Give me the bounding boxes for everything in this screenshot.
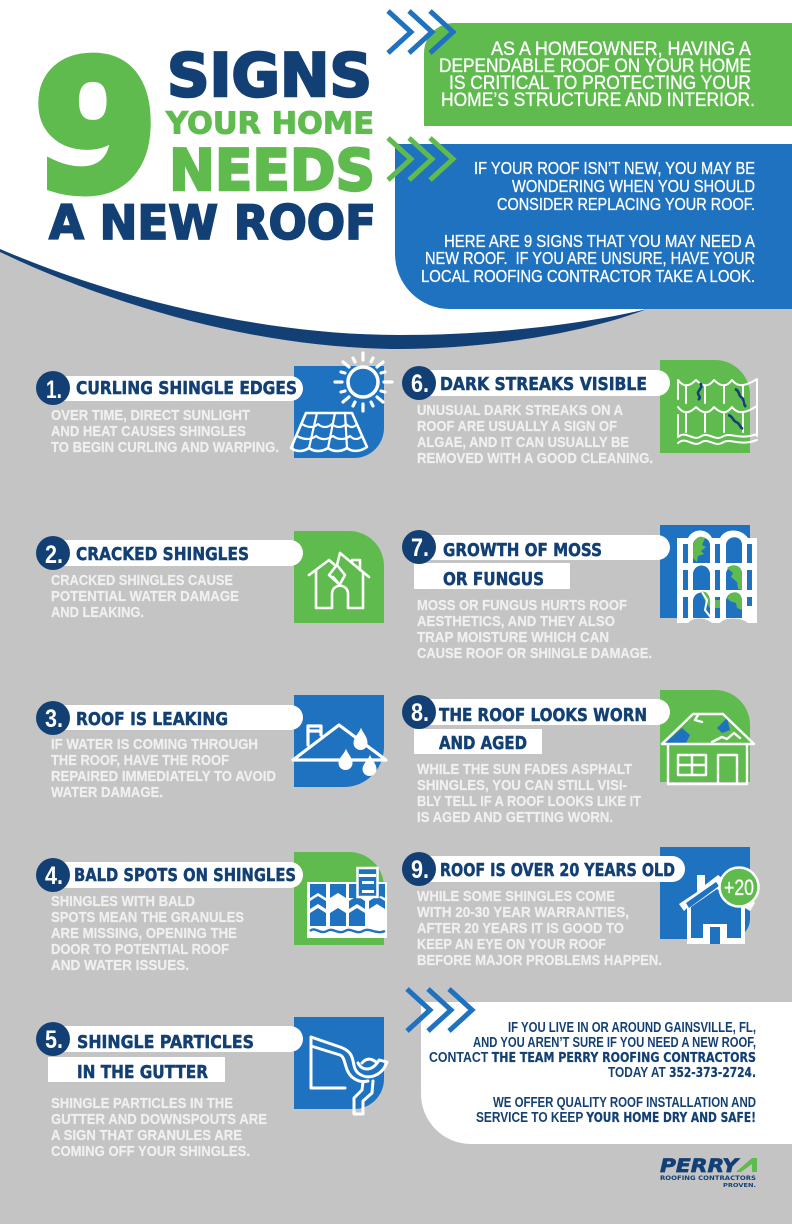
description xyxy=(417,889,662,969)
description: GUTTER AND DOWNSPOUTS ARE xyxy=(51,1112,267,1128)
title xyxy=(33,24,376,251)
description: SHINGLE PARTICLES IN THE xyxy=(51,1096,233,1112)
navy swoosh xyxy=(0,249,647,349)
panel: call to action xyxy=(421,1002,792,1144)
description: AFTER 20 YEARS IT IS GOOD TO xyxy=(417,921,624,937)
icon: bald shingles xyxy=(294,852,387,945)
description xyxy=(417,403,653,467)
description: CRACKED SHINGLES CAUSE xyxy=(51,573,233,589)
heading xyxy=(443,541,602,590)
title line: needs: NEEDS xyxy=(169,138,375,204)
number badge xyxy=(402,366,436,400)
description: POTENTIAL WATER DAMAGE xyxy=(51,589,239,605)
number badge: 4. xyxy=(45,862,63,890)
title line: signs: SIGNS xyxy=(167,41,372,111)
description: REMOVED WITH A GOOD CLEANING. xyxy=(417,451,653,467)
plus twenty label: +20 xyxy=(724,875,754,900)
heading: CRACKED SHINGLES xyxy=(76,545,249,565)
logo: Perry Roofing Contractors xyxy=(660,1155,757,1189)
heading xyxy=(77,1033,254,1083)
description: TRAP MOISTURE WHICH CAN xyxy=(417,630,609,646)
heading box line two xyxy=(48,1057,225,1082)
heading pill xyxy=(50,862,303,888)
description xyxy=(51,573,239,621)
intro text: HOME’S STRUCTURE AND INTERIOR. xyxy=(441,90,755,111)
number badge: 8. xyxy=(411,699,429,727)
panel: sign 8 xyxy=(402,690,754,826)
description: AESTHETICS, AND THEY ALSO xyxy=(417,614,615,630)
heading pill xyxy=(416,535,670,560)
heading box line two xyxy=(414,563,570,589)
number badge xyxy=(36,536,70,570)
number badge: 1. xyxy=(46,376,62,404)
icon: worn house xyxy=(660,690,754,784)
arrow: blue chevrons xyxy=(388,11,453,53)
panel: blue intro xyxy=(395,144,792,309)
heading pill xyxy=(50,540,303,566)
description: COMING OFF YOUR SHINGLES. xyxy=(51,1144,250,1160)
big numeral 9: 9 xyxy=(33,24,158,233)
description xyxy=(51,737,276,801)
heading: SHINGLE PARTICLES xyxy=(77,1033,254,1053)
panel: sign 9 xyxy=(402,847,758,969)
description: IF WATER IS COMING THROUGH xyxy=(51,737,258,753)
number badge: 3. xyxy=(45,705,63,733)
heading xyxy=(439,706,647,754)
arrow: green chevrons xyxy=(388,138,453,180)
description: WHILE THE SUN FADES ASPHALT xyxy=(417,762,632,778)
description: BLY TELL IF A ROOF LOOKS LIKE IT xyxy=(417,794,641,810)
icon: moss on tiles xyxy=(660,525,757,623)
description: AND HEAT CAUSES SHINGLES xyxy=(51,424,246,440)
logo roof mark xyxy=(736,1158,757,1172)
description: ROOF ARE USUALLY A SIGN OF xyxy=(417,419,617,435)
description: SHINGLES WITH BALD xyxy=(51,894,195,910)
description: DOOR TO POTENTIAL ROOF xyxy=(51,942,229,958)
panel: sign 1 xyxy=(36,353,392,458)
description: MOSS OR FUNGUS HURTS ROOF xyxy=(417,598,627,614)
intro text: DEPENDABLE ROOF ON YOUR HOME xyxy=(439,56,751,77)
title line: a new roof: A NEW ROOF xyxy=(49,196,376,251)
heading box line two xyxy=(414,729,542,754)
number badge xyxy=(402,695,436,729)
number badge xyxy=(402,852,436,886)
panel: sign 5 xyxy=(36,1017,387,1160)
heading: OR FUNGUS xyxy=(443,570,544,590)
number badge: 9. xyxy=(411,856,429,884)
description: SPOTS MEAN THE GRANULES xyxy=(51,910,244,926)
description: UNUSUAL DARK STREAKS ON A xyxy=(417,403,623,419)
intro question text xyxy=(421,158,755,286)
description: WATER DAMAGE. xyxy=(51,785,163,801)
number badge xyxy=(36,701,70,735)
heading: BALD SPOTS ON SHINGLES xyxy=(74,866,296,886)
heading pill xyxy=(50,705,303,730)
call to action text xyxy=(429,1020,756,1126)
description xyxy=(417,598,652,662)
intro text: AS A HOMEOWNER, HAVING A xyxy=(491,39,751,60)
number badge xyxy=(36,858,70,892)
description: ALGAE, AND IT CAN USUALLY BE xyxy=(417,435,629,451)
description: WHILE SOME SHINGLES COME xyxy=(417,889,615,905)
heading: THE ROOF LOOKS WORN xyxy=(439,706,647,726)
intro text xyxy=(439,39,755,111)
icon: sun and roof xyxy=(291,353,392,458)
number badge xyxy=(36,371,70,405)
icon: leaking roof xyxy=(293,695,386,787)
panel: sign 7 xyxy=(402,525,757,662)
heading: CURLING SHINGLE EDGES xyxy=(76,379,297,399)
description: AND LEAKING. xyxy=(51,605,144,621)
description: WITH 20-30 YEAR WARRANTIES, xyxy=(417,905,629,921)
description xyxy=(51,1096,267,1160)
number badge: 5. xyxy=(45,1026,63,1054)
description: AND WATER ISSUES. xyxy=(51,958,189,974)
icon: old house plus 20 xyxy=(660,847,758,944)
heading: IN THE GUTTER xyxy=(77,1063,208,1083)
number badge xyxy=(36,1022,70,1056)
heading: GROWTH OF MOSS xyxy=(443,541,602,561)
call to action text: TODAY AT 352-373-2724. xyxy=(608,1065,756,1081)
description xyxy=(51,894,244,974)
call to action text: CONTACT THE TEAM PERRY ROOFING CONTRACTORS xyxy=(429,1050,756,1066)
description: OVER TIME, DIRECT SUNLIGHT xyxy=(51,408,250,424)
panel: green intro xyxy=(424,23,792,126)
heading: DARK STREAKS VISIBLE xyxy=(440,375,647,395)
heading pill xyxy=(50,376,303,401)
description: ARE MISSING, OPENING THE xyxy=(51,926,237,942)
heading: ROOF IS OVER 20 YEARS OLD xyxy=(440,861,675,881)
description: IS AGED AND GETTING WORN. xyxy=(417,810,613,826)
panel: sign 2 xyxy=(36,531,384,623)
heading: AND AGED xyxy=(439,734,527,754)
icon: cracked house xyxy=(294,531,384,623)
icon: dark streaks xyxy=(660,360,757,453)
description: SHINGLES, YOU CAN STILL VISI- xyxy=(417,778,627,794)
description: BEFORE MAJOR PROBLEMS HAPPEN. xyxy=(417,953,662,969)
logo tagline: PROVEN. xyxy=(723,1183,756,1189)
description: TO BEGIN CURLING AND WARPING. xyxy=(51,440,279,456)
number badge xyxy=(402,530,436,564)
icon: gutter xyxy=(294,1017,387,1114)
heading pill xyxy=(416,370,670,396)
description: THE ROOF, HAVE THE ROOF xyxy=(51,753,229,769)
call to action text: SERVICE TO KEEP YOUR HOME DRY AND SAFE! xyxy=(476,1110,756,1126)
arrow: call to action chevrons xyxy=(407,989,472,1031)
logo name: PERRY xyxy=(660,1155,741,1177)
description xyxy=(51,408,279,456)
intro text: IS CRITICAL TO PROTECTING YOUR xyxy=(449,73,751,94)
heading pill xyxy=(416,856,685,882)
panel: sign 3 xyxy=(36,695,386,801)
description: A SIGN THAT GRANULES ARE xyxy=(51,1128,242,1144)
title line: your home: YOUR HOME xyxy=(165,106,374,142)
logo subtitle: ROOFING CONTRACTORS xyxy=(660,1174,756,1182)
panel: sign 4 xyxy=(36,852,387,974)
panel: sign 6 xyxy=(402,360,757,467)
description: CAUSE ROOF OR SHINGLE DAMAGE. xyxy=(417,646,652,662)
heading pill xyxy=(416,699,670,725)
number badge: 2. xyxy=(45,541,63,569)
heading pill xyxy=(50,1026,303,1052)
white header background xyxy=(0,0,792,349)
description: KEEP AN EYE ON YOUR ROOF xyxy=(417,937,606,953)
number badge: 6. xyxy=(411,370,429,398)
number badge: 7. xyxy=(411,534,429,562)
heading: ROOF IS LEAKING xyxy=(76,710,228,730)
description: REPAIRED IMMEDIATELY TO AVOID xyxy=(51,769,276,785)
description xyxy=(417,762,641,826)
